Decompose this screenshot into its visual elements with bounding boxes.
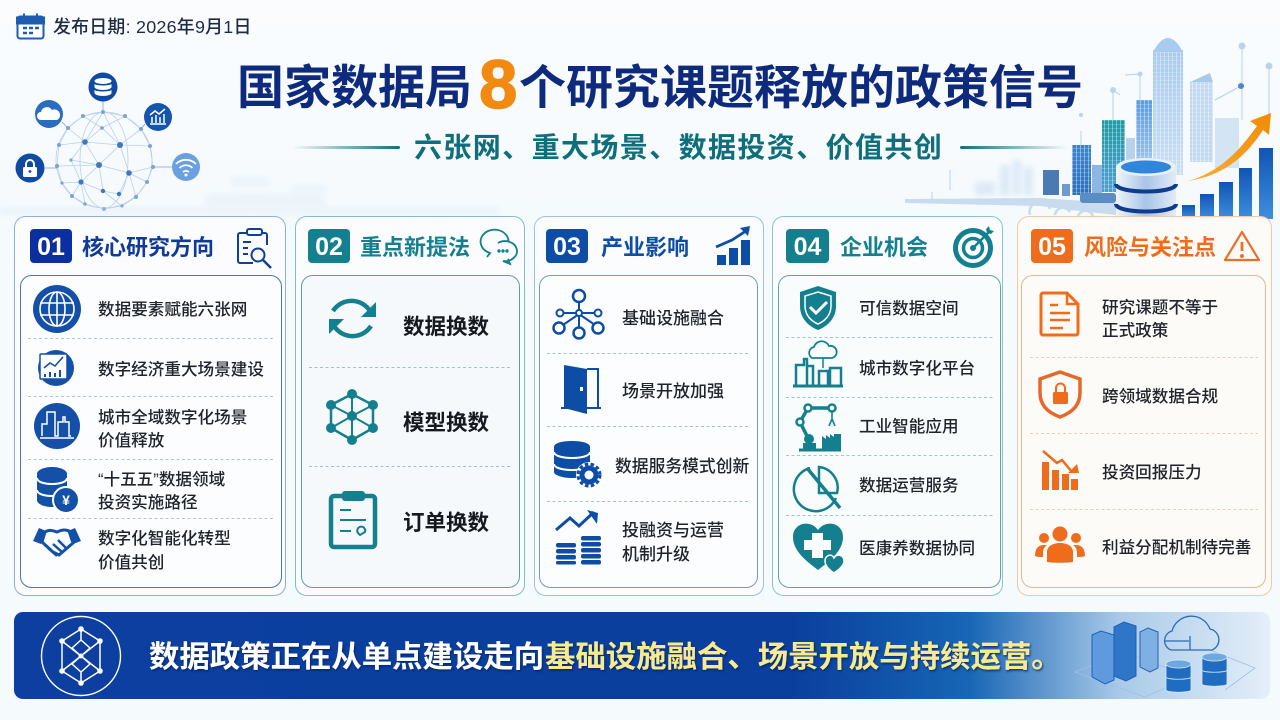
- item: infrastructure: [554, 290, 724, 338]
- item: order for value: 订单换数: [403, 511, 490, 535]
- item: research is not policy: 正式政策: [1102, 321, 1169, 340]
- item: value co-creation: 数字化智能化转型: [98, 529, 231, 548]
- subtitle: [292, 132, 1068, 163]
- badge 04: [786, 229, 829, 263]
- item: city platform: 城市数字化平台: [859, 358, 975, 378]
- item: investment path: “十五五”数据领域: [98, 470, 226, 489]
- title: 个研究课题释放的政策信号: [519, 61, 1083, 114]
- item: trusted data space: [800, 286, 959, 330]
- icon: target: [956, 226, 994, 266]
- item: investment path: [37, 467, 226, 513]
- item: value co-creation: [33, 528, 231, 572]
- icon: wifi node: [172, 153, 200, 181]
- panel heading: 风险与关注点: [1084, 235, 1216, 260]
- item: data operations: [794, 467, 959, 511]
- date text: 发布日期: 2026年9月1日: [53, 17, 252, 37]
- panel: industry impact: [534, 216, 764, 596]
- illustration: servers, cloud and databases: [1075, 616, 1255, 697]
- item: healthcare data: 医康养数据协同: [859, 538, 975, 558]
- item: healthcare data: [793, 524, 975, 573]
- footer banner: [14, 612, 1270, 699]
- item: cross-domain compliance: 跨领域数据合规: [1102, 387, 1218, 406]
- item: city digital: 价值释放: [98, 431, 165, 450]
- panel: core research directions: [14, 216, 286, 596]
- item: model for value: [326, 389, 490, 445]
- badge 01: [30, 229, 72, 263]
- panel heading: 产业影响: [601, 235, 689, 260]
- footer message: [149, 640, 1062, 674]
- badge 03: 03: [553, 233, 581, 261]
- panel: risks and concerns: [1018, 216, 1272, 596]
- icon: rising bars: [716, 226, 750, 265]
- item: data operations: 数据运营服务: [859, 476, 959, 495]
- item: financing: 投融资与运营: [622, 521, 724, 540]
- badge 02: 02: [315, 233, 343, 261]
- item: data for value: 数据换数: [403, 315, 490, 339]
- icon: calendar: [17, 14, 44, 38]
- item: city digital: 城市全域数字化场景: [98, 407, 247, 427]
- date line: [17, 14, 252, 38]
- icon: network sphere: [42, 616, 120, 696]
- badge 01: 01: [37, 233, 65, 261]
- icon: cloud node: [35, 100, 63, 128]
- item: six networks: 数据要素赋能六张网: [98, 300, 247, 319]
- item: industrial AI: [796, 404, 959, 450]
- item: model for value: 模型换数: [403, 411, 490, 435]
- item: infrastructure: 基础设施融合: [622, 309, 724, 328]
- item: key scenarios: [38, 350, 264, 386]
- item: financing: [556, 510, 724, 564]
- subtitle: 六张网、重大场景、数据投资、价值共创: [414, 132, 943, 163]
- panel heading: 重点新提法: [360, 235, 470, 260]
- badge 02: [308, 229, 350, 263]
- icon: chat bubbles: [481, 230, 517, 264]
- badge 03: [546, 229, 588, 263]
- item: trusted data space: 可信数据空间: [859, 299, 959, 318]
- item: door: [561, 365, 724, 414]
- badge 05: 05: [1038, 233, 1066, 261]
- item: industrial AI: 工业智能应用: [859, 417, 959, 436]
- badge 04: 04: [794, 233, 821, 261]
- icon: database node: [88, 72, 118, 102]
- item: cross-domain compliance: [1040, 372, 1218, 417]
- item: data for value: [329, 301, 490, 339]
- item: order for value: [331, 491, 490, 547]
- item: six networks: [33, 285, 247, 333]
- panel: new terms: [296, 216, 524, 596]
- panel heading: 核心研究方向: [82, 235, 214, 260]
- item: value co-creation: 价值共创: [98, 553, 164, 572]
- illustration: data network globe: [16, 72, 200, 211]
- item: investment path: ¥: [62, 492, 70, 508]
- item: data services: 数据服务模式创新: [615, 457, 749, 476]
- icon: clipboard search: [238, 229, 271, 268]
- badge 05: [1031, 229, 1073, 263]
- footer message: 基础设施融合、场景开放与持续运营。: [545, 640, 1062, 674]
- item: research is not policy: [1041, 293, 1218, 340]
- icon: lock node: [16, 154, 44, 182]
- footer message: 数据政策正在从单点建设走向: [149, 640, 544, 674]
- item: investment return pressure: 投资回报压力: [1102, 463, 1202, 482]
- item: city digital: [34, 403, 247, 450]
- icon: chart node: [144, 103, 172, 131]
- icon: growth arrow: [1188, 113, 1271, 181]
- icon: warning triangle: [1225, 232, 1259, 260]
- item: data services: [554, 441, 749, 488]
- title: 国家数据局: [237, 61, 472, 114]
- title: [237, 46, 1083, 123]
- item: investment return pressure: [1042, 451, 1202, 490]
- item: door: 场景开放加强: [622, 382, 724, 401]
- item: benefit sharing: 利益分配机制待完善: [1102, 537, 1251, 557]
- item: financing: 机制升级: [622, 545, 690, 564]
- item: investment path: 投资实施路径: [98, 492, 198, 512]
- item: key scenarios: 数字经济重大场景建设: [98, 360, 264, 379]
- illustration: city skyline with database and growth arrow: [905, 38, 1273, 222]
- icon: database cylinder: [1116, 158, 1176, 222]
- title: 8: [479, 46, 517, 123]
- item: benefit sharing: [1035, 526, 1251, 563]
- item: city platform: [793, 341, 975, 386]
- item: research is not policy: 研究课题不等于: [1102, 297, 1218, 317]
- faint background skyline left: [0, 176, 500, 215]
- panel: enterprise opportunities: [772, 216, 1002, 596]
- panel heading: 企业机会: [840, 235, 928, 260]
